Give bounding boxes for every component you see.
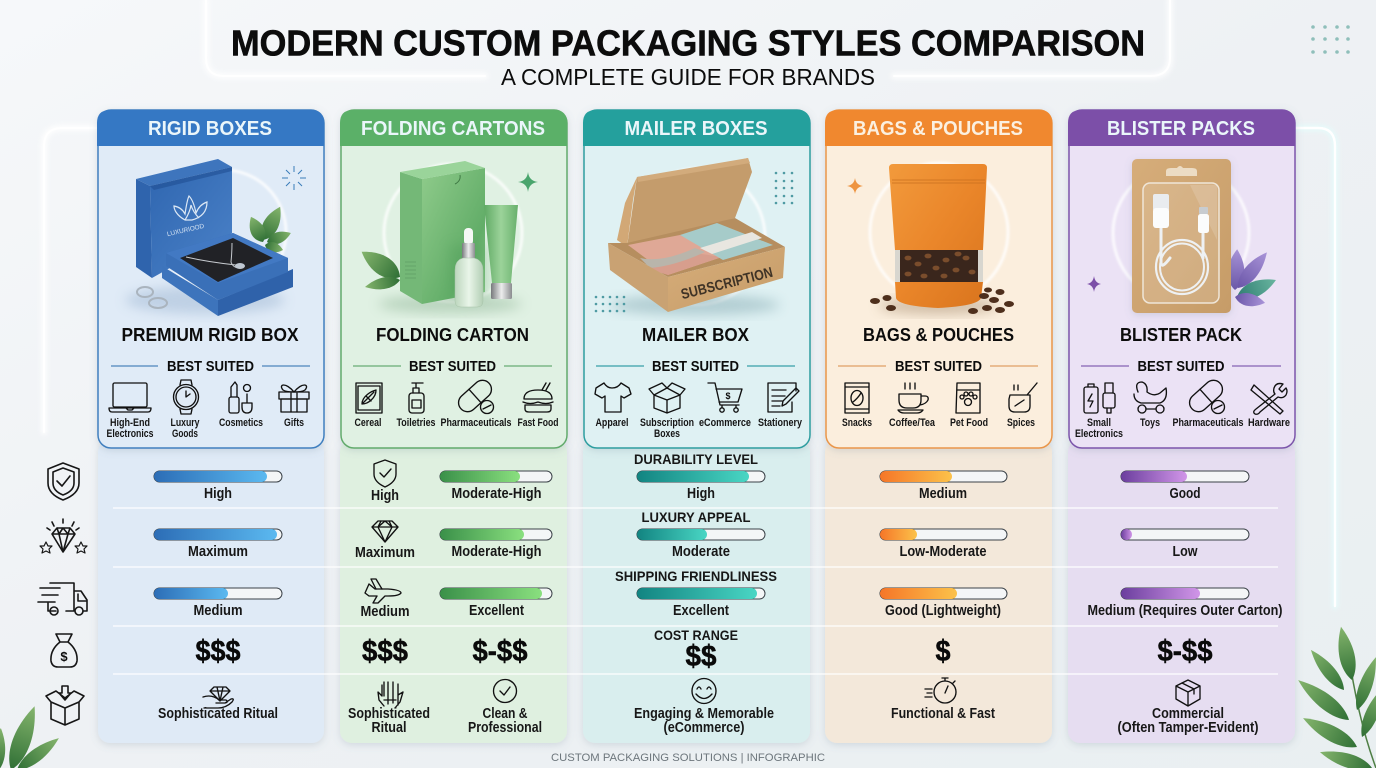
header: bags and pouches: BAGS & POUCHES: [853, 118, 1023, 140]
cost: $: [936, 635, 951, 668]
durability bar: [440, 471, 552, 482]
icon: airplane: [365, 579, 401, 603]
icon: toiletries: [409, 383, 424, 413]
glowing header frame: [206, 0, 1170, 76]
row heading: luxury appeal: LUXURY APPEAL: [642, 509, 751, 525]
cost: $$$: [196, 635, 241, 668]
icon: t-shirt: [595, 383, 631, 412]
header: blister packs: [1068, 110, 1295, 146]
luxury bar: [880, 529, 1007, 540]
shipping bar: [880, 588, 1007, 599]
label: coffee and tea: Coffee/Tea: [889, 417, 936, 429]
label: cosmetics: Cosmetics: [219, 417, 263, 429]
label: high-end electronics: High-End: [110, 417, 150, 429]
icon: package: [1176, 680, 1200, 706]
header: folding cartons: [340, 110, 567, 146]
illustration: carton, bottle and tube: [356, 161, 538, 313]
icon: stationery: [768, 383, 799, 412]
durability value: Moderate-High: [452, 486, 542, 502]
label: pet food: Pet Food: [950, 417, 988, 429]
experience value: [1118, 706, 1259, 736]
icon: battery and usb: [1084, 383, 1115, 413]
best suited heading: BEST SUITED: [1138, 359, 1224, 375]
value: high: High: [371, 488, 399, 504]
experience value two: Professional: [468, 720, 542, 736]
best suited heading: BEST SUITED: [409, 359, 496, 375]
icon: hands: [378, 682, 403, 708]
cost two: $-$$: [472, 635, 528, 668]
illustration: rigid box with necklace: LUXURIOOD: [166, 223, 205, 238]
icon: gift: [279, 385, 309, 412]
icon: snack bag: [845, 383, 869, 413]
label: pharmaceuticals: Pharmaceuticals: [440, 417, 512, 429]
experience value one: Ritual: [372, 720, 406, 736]
icon: smiley: [692, 678, 716, 704]
label: spices: Spices: [1007, 417, 1035, 429]
label: small electronics: Small: [1087, 417, 1111, 429]
icon: cost money bag: [51, 634, 77, 667]
durability bar: [1121, 471, 1249, 482]
label: ecommerce: eCommerce: [699, 417, 751, 429]
glowing side frames: [44, 128, 1335, 606]
decorative leaves bottom right: [1293, 625, 1376, 768]
shipping value: Excellent: [469, 603, 524, 619]
row divider lines: [113, 508, 1278, 674]
label: subscription boxes: Subscription: [640, 417, 694, 429]
comparison: rigid boxes: [154, 471, 282, 722]
icon: unboxing experience: [46, 686, 84, 725]
icon: coffee cup: [898, 383, 928, 413]
product name: premium rigid box: PREMIUM RIGID BOX: [122, 324, 299, 345]
experience value: (eCommerce): [664, 720, 745, 736]
decorative leaves bottom left: [0, 703, 63, 768]
durability value: High: [687, 486, 715, 502]
label: apparel: Apparel: [596, 417, 628, 429]
label: gifts: Gifts: [284, 417, 304, 429]
row heading: cost range: COST RANGE: [654, 627, 738, 643]
header: mailer boxes: MAILER BOXES: [624, 118, 768, 140]
illustration: stand-up pouch with coffee beans: [847, 163, 1014, 314]
illustration: open mailer box: SUBSCRIPTION: [679, 265, 775, 303]
luxury value: Low: [1172, 544, 1198, 560]
comparison: mailer boxes: [615, 451, 777, 736]
experience value two: [468, 706, 542, 736]
row heading: durability level: DURABILITY LEVEL: [634, 451, 758, 467]
durability bar: [154, 471, 282, 482]
label: toiletries: Toiletries: [396, 417, 436, 429]
label: cereal: Cereal: [354, 417, 382, 429]
panel: rigid boxes: [97, 110, 324, 448]
product name: folding carton: FOLDING CARTON: [376, 324, 529, 345]
header: rigid boxes: [97, 110, 324, 146]
label: toys: Toys: [1140, 417, 1160, 429]
experience value: (Often Tamper-Evident): [1118, 720, 1259, 736]
footer: CUSTOM PACKAGING SOLUTIONS | INFOGRAPHIC: [551, 752, 825, 764]
luxury bar: [154, 529, 282, 540]
illustration: rigid box with necklace: [125, 159, 306, 316]
header: folding cartons: FOLDING CARTONS: [361, 118, 545, 140]
cost: $$: [686, 640, 717, 673]
label: hardware: Hardware: [1248, 417, 1290, 429]
panel: blister packs: [1068, 110, 1295, 448]
icon: wrench and screwdriver: [1251, 384, 1287, 414]
shipping value: Medium: [194, 603, 242, 619]
label: pharmaceuticals: Pharmaceuticals: [1172, 417, 1244, 429]
row heading: shipping friendliness: SHIPPING FRIENDLINESS: [615, 568, 777, 584]
icon: diamond: [372, 521, 398, 542]
icon: shipping truck: [38, 583, 87, 615]
label: high-end electronics: [106, 417, 154, 440]
header: blister packs: BLISTER PACKS: [1107, 118, 1255, 140]
title: MODERN CUSTOM PACKAGING STYLES COMPARISON: [231, 22, 1145, 64]
label: small electronics: Electronics: [1075, 428, 1123, 440]
icon: pills: [455, 377, 495, 415]
header: rigid boxes: RIGID BOXES: [148, 118, 272, 140]
icon: toy duck: [1134, 382, 1166, 413]
experience value: Sophisticated Ritual: [158, 706, 278, 722]
durability value: High: [204, 486, 232, 502]
product name: blister pack: BLISTER PACK: [1120, 324, 1243, 345]
icon: shield: [374, 460, 396, 487]
luxury value: Moderate-High: [452, 544, 542, 560]
shipping value: Medium (Requires Outer Carton): [1088, 603, 1283, 619]
experience value: Engaging & Memorable: [634, 706, 774, 722]
label: small electronics: [1075, 417, 1123, 440]
experience value one: Sophisticated: [348, 706, 430, 722]
luxury value: Low-Moderate: [900, 544, 986, 560]
label: subscription boxes: Boxes: [654, 428, 680, 440]
luxury value: Moderate: [672, 544, 730, 560]
luxury bar: [440, 529, 552, 540]
value: medium: Medium: [360, 604, 410, 620]
experience value: [634, 706, 774, 736]
durability value: Medium: [919, 486, 967, 502]
luxury bar: [637, 529, 765, 540]
icon: watch: [174, 380, 198, 414]
icon: pills: [1186, 377, 1226, 415]
shipping bar: [637, 588, 765, 599]
icon: hand with diamond: [203, 687, 233, 708]
best suited heading: BEST SUITED: [167, 359, 254, 375]
icon: shopping cart: [708, 383, 742, 412]
icon: check circle: [494, 680, 516, 702]
lower comparison panels: [98, 440, 1295, 743]
cost: $-$$: [1158, 635, 1213, 668]
shipping bar: [1121, 588, 1249, 599]
panel: bags and pouches: [825, 110, 1052, 448]
icon: cereal bag: [356, 383, 382, 413]
header: mailer boxes: [583, 110, 810, 146]
decorative dots top right: [1311, 25, 1350, 54]
luxury bar: [1121, 529, 1249, 540]
icon: spices jar: [1009, 383, 1037, 412]
icon: burger: [523, 383, 553, 412]
shipping value: Excellent: [673, 603, 729, 619]
durability bar: [880, 471, 1007, 482]
money bag dollar sign: $: [60, 649, 68, 664]
cost: $$$: [362, 635, 408, 668]
label: luxury goods: [170, 417, 200, 440]
comparison: blister packs: [1088, 471, 1283, 736]
experience value: Functional & Fast: [891, 706, 995, 722]
icon: laptop: [109, 383, 151, 412]
experience value one: [348, 706, 430, 736]
illustration: open mailer box: [595, 158, 793, 315]
shipping value: Good (Lightweight): [885, 603, 1001, 619]
best suited heading: BEST SUITED: [895, 359, 982, 375]
comparison: bags and pouches: [880, 471, 1007, 722]
header: bags and pouches: [825, 110, 1052, 146]
best suited heading: BEST SUITED: [652, 359, 739, 375]
shipping bar: [154, 588, 282, 599]
subtitle: A COMPLETE GUIDE FOR BRANDS: [501, 64, 875, 90]
label: stationery: Stationery: [758, 417, 802, 429]
panel: mailer boxes: [583, 110, 810, 448]
product name: bags and pouches: BAGS & POUCHES: [863, 324, 1014, 345]
experience value: Commercial: [1152, 706, 1224, 722]
label: fast food: Fast Food: [518, 417, 558, 429]
product name: mailer box: MAILER BOX: [642, 324, 750, 345]
durability value: Good: [1170, 486, 1200, 502]
label: high-end electronics: Electronics: [106, 428, 154, 440]
icon: pet food: [956, 383, 980, 413]
label: luxury goods: Luxury: [170, 417, 200, 429]
label: luxury goods: Goods: [172, 428, 198, 440]
label: snacks: Snacks: [842, 417, 872, 429]
icon: luxury diamond with stars: [40, 519, 87, 553]
icon: cosmetics: [229, 382, 252, 413]
comparison: folding cartons: [348, 460, 552, 736]
value: maximum: Maximum: [355, 545, 415, 561]
label: subscription boxes: [640, 417, 694, 440]
panel: folding cartons: [340, 110, 567, 448]
shipping bar: [440, 588, 552, 599]
experience value two: Clean &: [482, 706, 528, 722]
luxury value: Maximum: [188, 544, 248, 560]
icon: durability shield: [48, 463, 79, 500]
icon: open box: [649, 383, 685, 413]
panel: mailer boxes: $: [725, 391, 731, 401]
durability bar: [637, 471, 765, 482]
icon: stopwatch: [925, 678, 956, 703]
illustration: blister pack with usb cable: [1087, 159, 1279, 313]
